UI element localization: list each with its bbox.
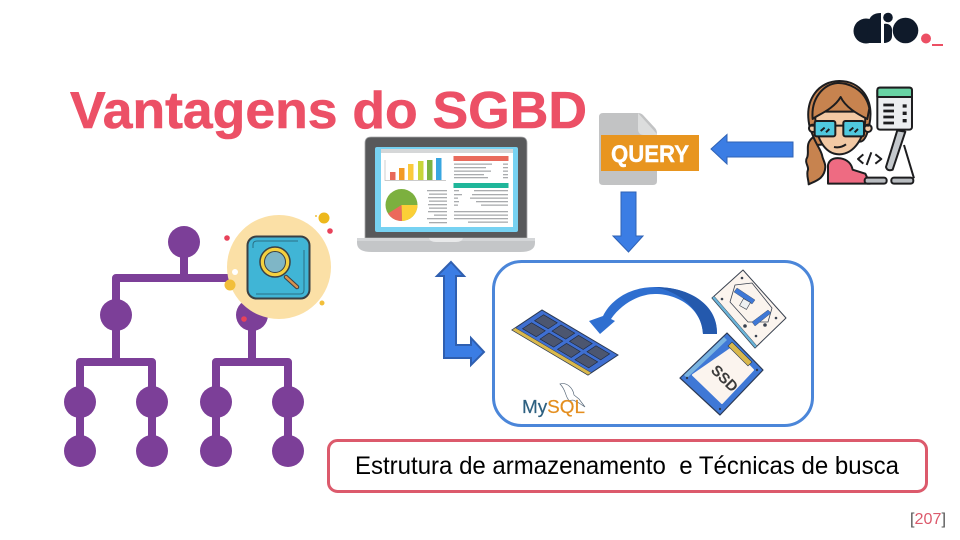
icon: query document — [599, 113, 699, 185]
face — [815, 112, 865, 154]
icon: MySQL logo: MySQL — [522, 397, 585, 417]
tree hierarchy — [64, 226, 304, 467]
icon: hard disk — [712, 270, 786, 348]
fringe — [812, 83, 869, 119]
pie chart — [386, 189, 418, 221]
page number: [207] — [910, 511, 946, 528]
icon: magnifier badge — [224, 212, 333, 322]
data tables — [427, 156, 508, 223]
icon: developer girl — [806, 81, 914, 184]
callout: storage and search — [328, 440, 926, 492]
tree diagram with search icon — [64, 212, 333, 467]
logo: dio — [854, 13, 943, 46]
icon: laptop with dashboard — [357, 137, 535, 252]
ears — [809, 125, 816, 132]
arrow: developer to query — [711, 134, 793, 164]
hair back — [808, 81, 870, 145]
arrow: disk to memory — [589, 287, 717, 334]
arrow: query to storage — [613, 192, 643, 252]
arrow: laptop and storage — [437, 262, 484, 365]
code symbol — [858, 152, 881, 165]
glasses — [815, 121, 835, 136]
monitor — [877, 88, 914, 184]
icon: RAM module — [512, 310, 618, 375]
icon: MySQL logo — [522, 384, 585, 417]
braid — [806, 137, 825, 184]
body — [828, 158, 870, 184]
icon: SSD: SSD — [707, 362, 741, 396]
callout: storage and search: Estrutura de armazenamento e Técnicas de busca — [355, 452, 899, 480]
panel: storage — [494, 262, 812, 426]
icon: SSD — [680, 333, 763, 415]
bar chart — [385, 158, 446, 180]
title: Vantagens do SGBD — [70, 82, 587, 140]
icon: query document: QUERY — [611, 141, 689, 168]
